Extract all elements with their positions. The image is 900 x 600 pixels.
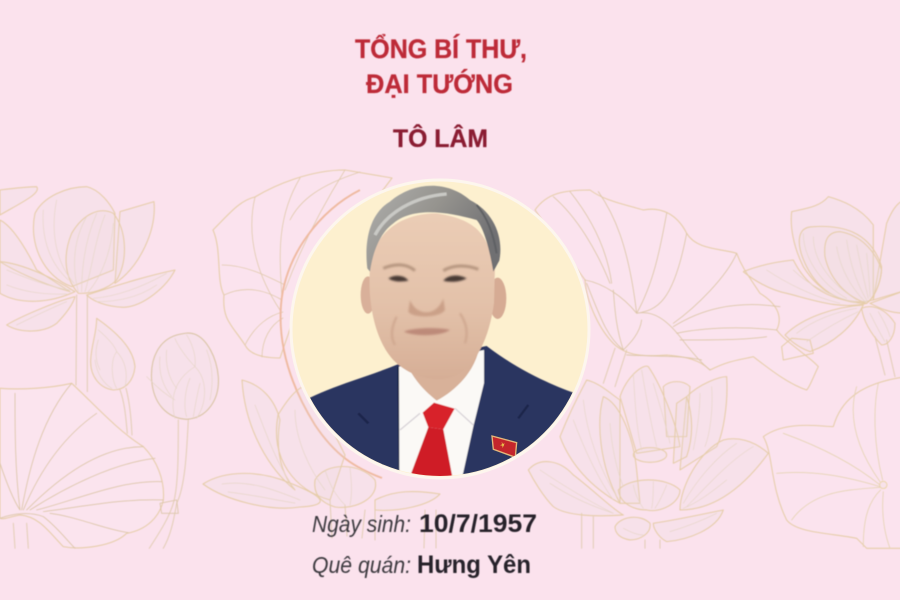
neck [411,354,478,401]
icon: lapel flag pin [492,436,517,457]
icon: lotus flower upper right [743,197,900,360]
ears [361,276,375,314]
name: TÔ LÂM [393,123,488,153]
face [369,213,495,379]
title [355,33,527,153]
icon: lotus leaf lower right [763,377,900,548]
icon: lotus leaf lower left [0,383,178,548]
lotus illustration: left cluster [0,187,218,548]
icon: lotus bud small [91,318,135,435]
decorative leaf ribs [222,170,360,357]
heading line 2: ĐẠI TƯỚNG [366,68,513,99]
lotus illustration: flower under portrait left [203,380,440,548]
icon: ring arc around portrait [281,190,382,478]
icon: lotus bud large [147,333,218,548]
lotus illustration: leaf and ring behind portrait [213,170,392,478]
tie [423,403,455,429]
details [312,510,537,579]
portrait [291,180,589,490]
lotus illustration: right cluster [528,190,900,548]
shirt [399,350,484,480]
icon: lotus flower lower centre right [528,366,768,548]
home town label: Quê quán: [312,552,411,578]
icon: lower centre-left lotus [203,380,440,548]
facial features [383,265,478,345]
heading line 1: TỔNG BÍ THƯ, [355,33,527,64]
photo of Tô Lâm [300,186,575,490]
home town value: Hưng Yên [417,551,531,579]
icon: lotus leaf behind portrait [213,170,392,358]
birth date value: 10/7/1957 [419,510,537,538]
suit [310,345,573,474]
icon: large lotus leaf upper right [535,190,895,390]
birth date label: Ngày sinh: [312,511,411,537]
hair [366,186,500,272]
icon: left open lotus flower [0,187,175,392]
portrait frame circle [291,180,589,478]
